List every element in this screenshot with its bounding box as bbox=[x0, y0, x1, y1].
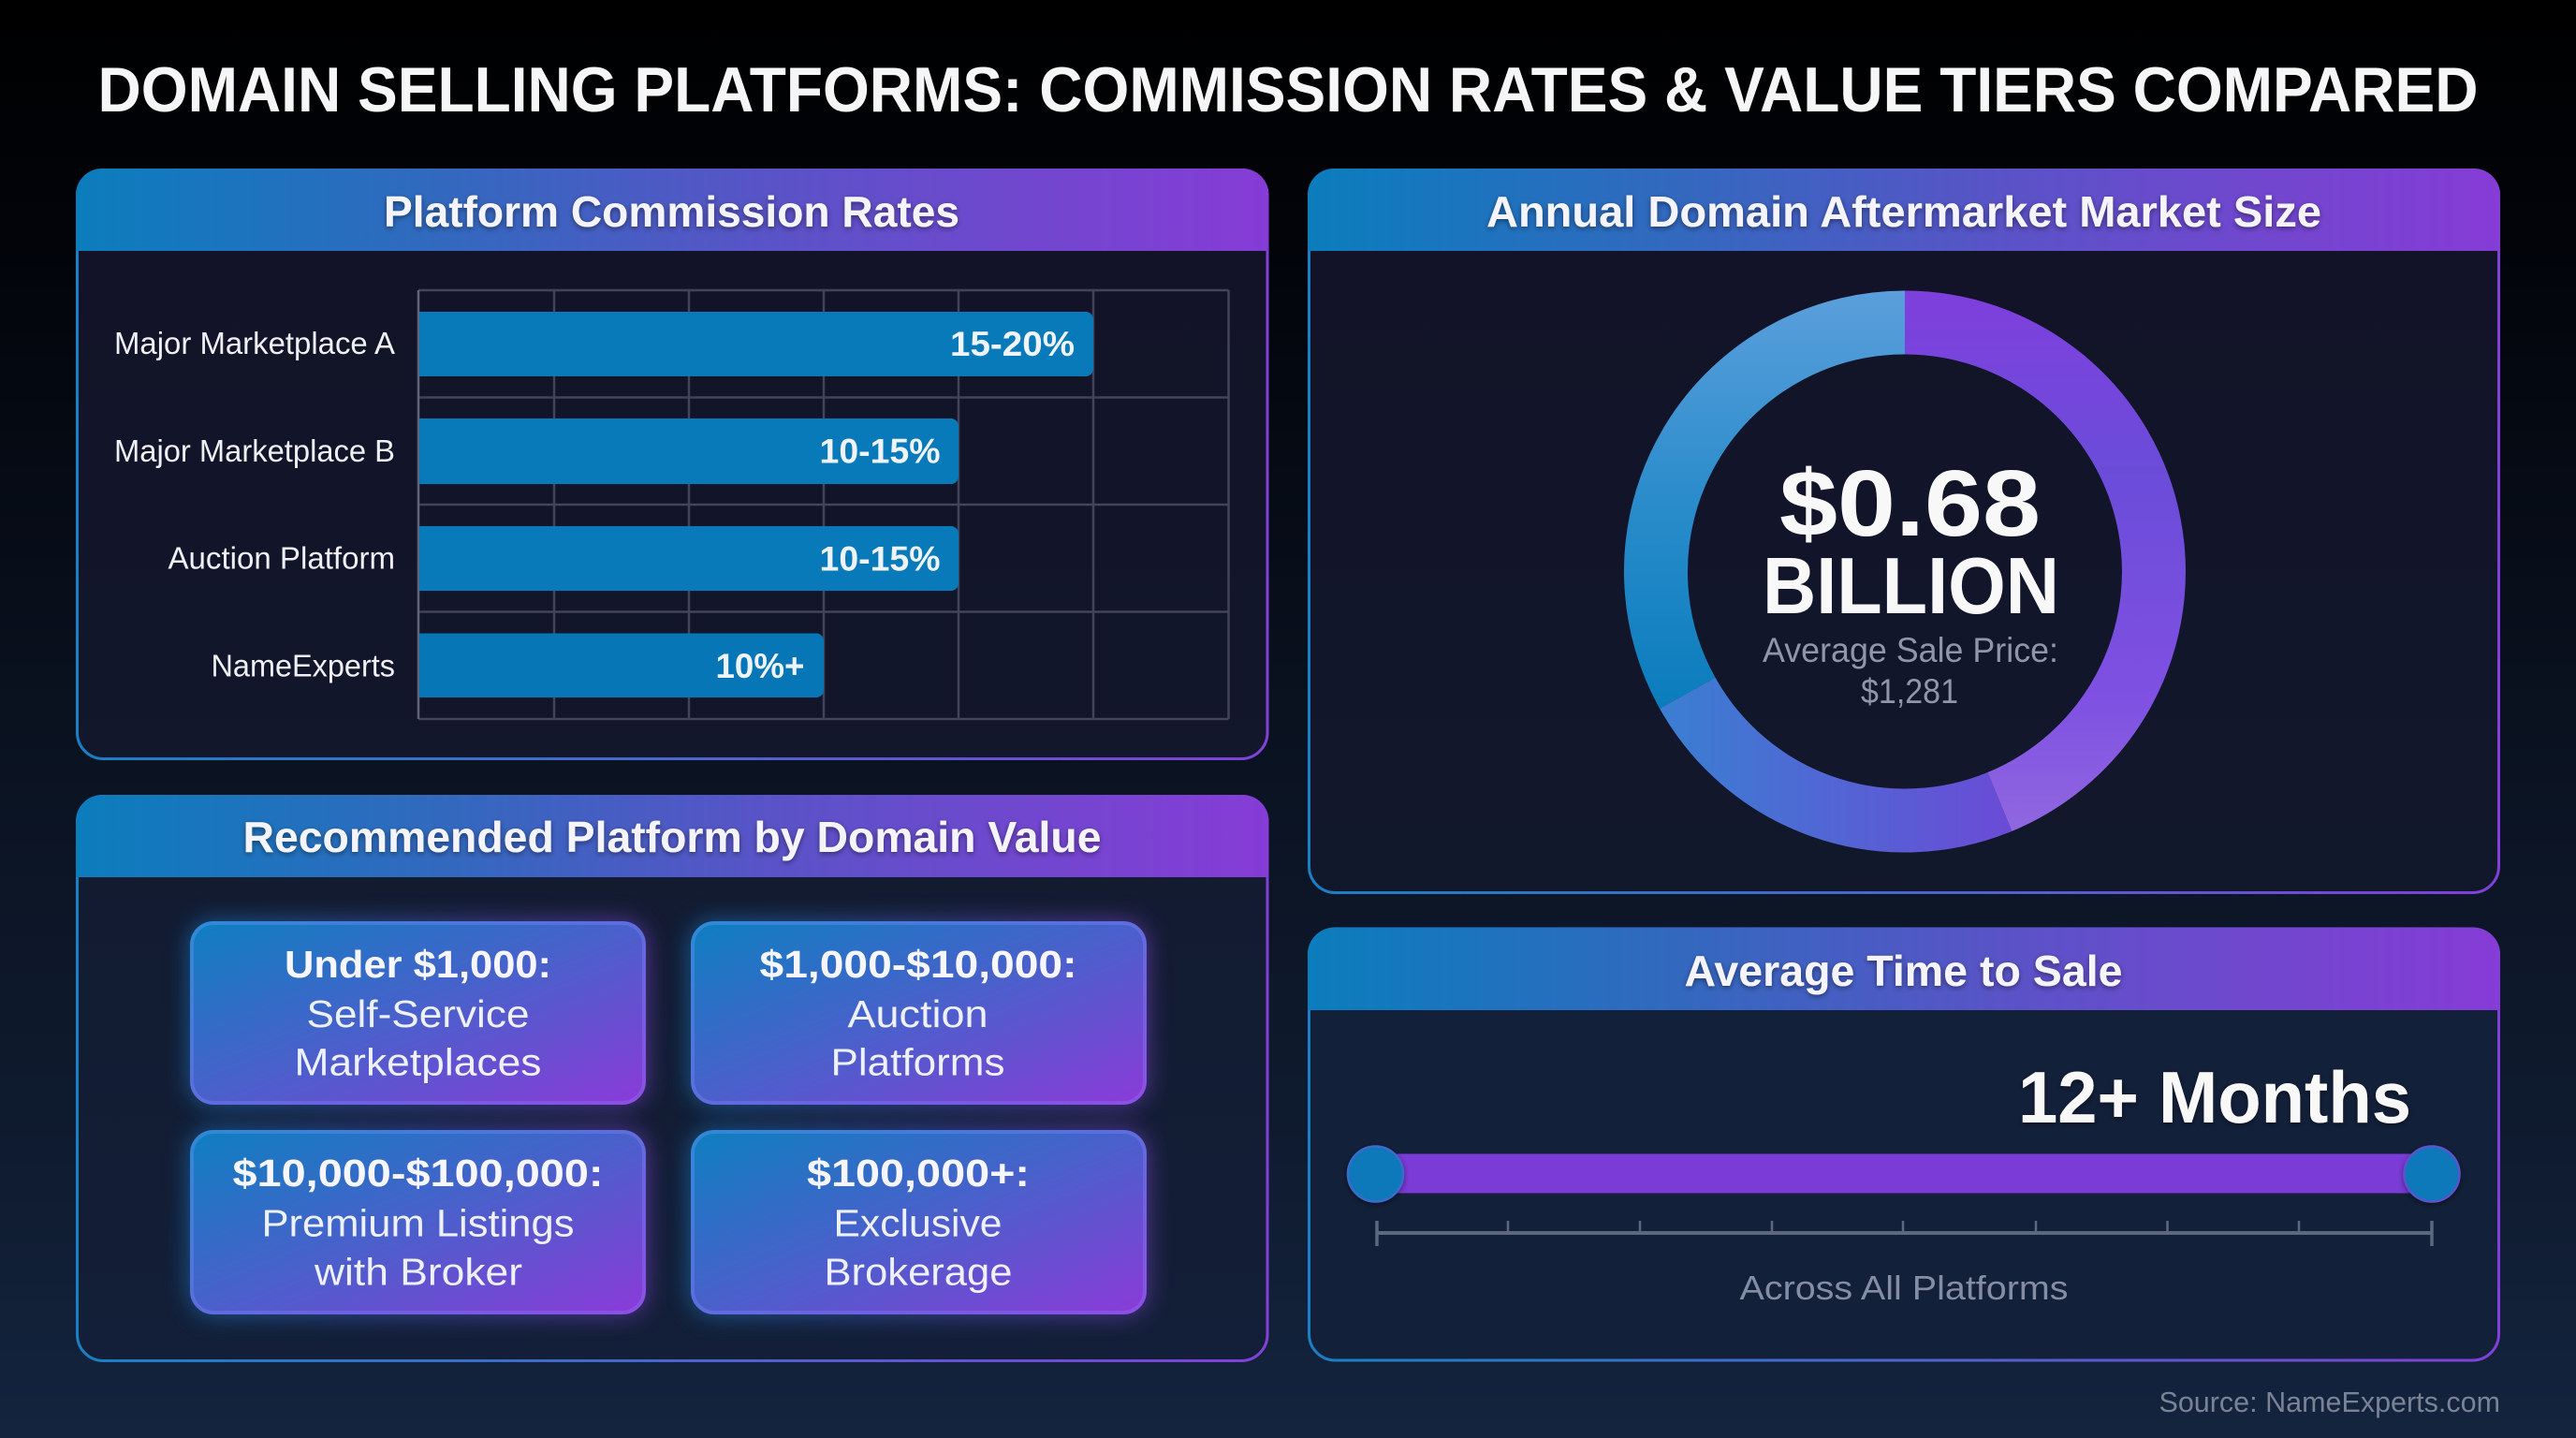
card: under $1,000: Marketplaces bbox=[294, 1041, 541, 1084]
card: $100,000+: Exclusive bbox=[833, 1202, 1002, 1245]
panel header: recommended platform bbox=[76, 795, 1269, 877]
card: under $1,000: Self-Service bbox=[307, 992, 530, 1035]
bar: NameExperts: 10%+ bbox=[715, 647, 805, 685]
panel: recommended platform by domain value bbox=[76, 795, 1269, 1361]
card: under $1,000: Under $1,000: bbox=[285, 943, 551, 986]
bar: Major Marketplace B: 10-15% bbox=[820, 433, 940, 470]
panel header: platform commission rates bbox=[76, 169, 1269, 251]
bar: Auction Platform bbox=[168, 526, 959, 591]
card: $10,000-$100,000: $10,000-$100,000: bbox=[232, 1152, 603, 1195]
bar: NameExperts bbox=[212, 633, 824, 697]
bar: Auction Platform: Auction Platform bbox=[168, 541, 395, 575]
bar: Major Marketplace A: Major Marketplace A bbox=[114, 326, 395, 360]
panel header: recommended platform: Recommended Platform by Domain Value bbox=[243, 813, 1101, 861]
card: $100,000+: $100,000+: bbox=[807, 1152, 1030, 1195]
card: under $1,000 bbox=[190, 921, 646, 1105]
timeline axis bbox=[1377, 1221, 2432, 1246]
bar chart: commission rates bbox=[114, 290, 1228, 719]
card: $1,000-$10,000: Platforms bbox=[831, 1041, 1005, 1084]
bar: Major Marketplace A: 15-20% bbox=[950, 325, 1075, 363]
panel header: annual market size bbox=[1308, 169, 2500, 251]
value: 12+ months: 12+ Months bbox=[2018, 1056, 2411, 1138]
source note: Source: NameExperts.com bbox=[2159, 1386, 2500, 1418]
panel header: annual market size: Annual Domain Aftermarket Market Size bbox=[1486, 187, 2321, 236]
card: $1,000-$10,000 bbox=[691, 921, 1147, 1105]
panel: average time to sale bbox=[1308, 928, 2500, 1360]
card: $1,000-$10,000: $1,000-$10,000: bbox=[760, 943, 1076, 986]
panel: platform commission rates bbox=[76, 169, 1269, 758]
bar: Auction Platform: 10-15% bbox=[820, 539, 940, 579]
title: DOMAIN SELLING PLATFORMS: COMMISSION RATES & VALUE TIERS COMPARED bbox=[97, 54, 2479, 125]
card: $100,000+: Brokerage bbox=[824, 1251, 1013, 1294]
card: $10,000-$100,000: with Broker bbox=[314, 1251, 522, 1294]
panel header: platform commission rates: Platform Commission Rates bbox=[384, 187, 959, 236]
bar: Major Marketplace B: Major Marketplace B bbox=[114, 433, 395, 468]
bar: Major Marketplace B bbox=[114, 418, 959, 484]
donut center value: BILLION bbox=[1763, 542, 2059, 631]
panel: annual domain aftermarket market size bbox=[1308, 169, 2500, 893]
donut center value bbox=[1763, 451, 2059, 711]
panel header: average time to sale: Average Time to Sale bbox=[1685, 946, 2123, 995]
donut chart bbox=[1656, 322, 2154, 820]
timeline caption: Across All Platforms bbox=[1739, 1269, 2069, 1307]
bar: NameExperts: NameExperts bbox=[212, 648, 395, 683]
card: $10,000-$100,000 bbox=[190, 1130, 646, 1314]
bar: Major Marketplace A bbox=[114, 312, 1093, 376]
panel header: average time to sale bbox=[1308, 928, 2500, 1010]
card: $1,000-$10,000: Auction bbox=[848, 992, 988, 1035]
donut center value: $1,281 bbox=[1861, 672, 1958, 711]
donut center value: Average Sale Price: bbox=[1763, 631, 2058, 669]
timeline bar bbox=[1348, 1146, 2460, 1202]
donut center value: $0.68 bbox=[1779, 451, 2041, 556]
card: $10,000-$100,000: Premium Listings bbox=[262, 1202, 575, 1245]
card: $100,000+ bbox=[691, 1130, 1147, 1314]
